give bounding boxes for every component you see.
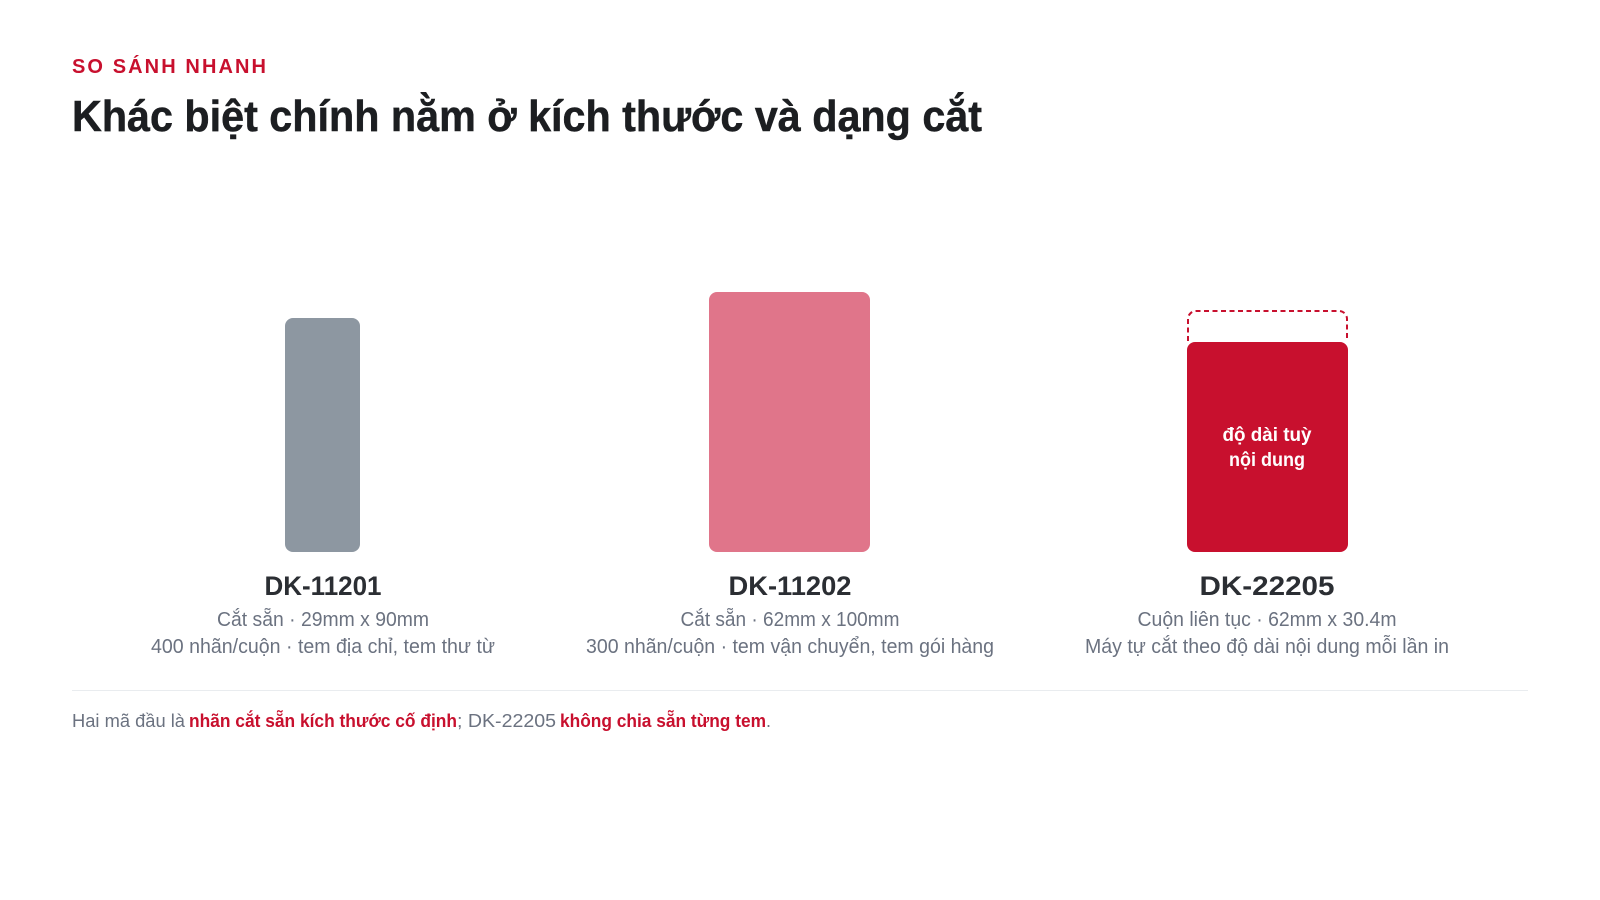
bar caption: độ dài tuỳ <box>1222 425 1312 446</box>
spec line: Cắt sẵn · 29mm x 90mm <box>217 608 429 631</box>
footnote <box>72 709 771 731</box>
usage line: 300 nhãn/cuộn · tem vận chuyển, tem gói hàng <box>586 636 994 658</box>
dashed outline: variable length <box>1188 311 1347 341</box>
model name: DK-11202: DK-11202 <box>728 571 852 601</box>
spec line: Cắt sẵn · 62mm x 100mm <box>680 608 900 631</box>
label bar: DK-11201 <box>285 318 360 552</box>
label bar: DK-11202 <box>709 292 870 552</box>
footnote: không chia sẵn từng tem <box>560 709 766 731</box>
spec line: Cuộn liên tục · 62mm x 30.4m <box>1138 609 1396 631</box>
panel: DK-22205 <box>1085 311 1449 658</box>
footnote: . <box>766 711 771 731</box>
usage line: 400 nhãn/cuộn · tem địa chỉ, tem thư từ <box>151 636 495 658</box>
panel: DK-11202 <box>586 292 994 658</box>
eyebrow: SO SÁNH NHANH <box>72 55 266 78</box>
bar caption: nội dung <box>1229 450 1305 471</box>
model name: DK-22205: DK-22205 <box>1200 571 1334 601</box>
footnote: Hai mã đầu là <box>72 711 186 731</box>
model name: DK-11201: DK-11201 <box>264 571 382 601</box>
label bar: DK-22205 <box>1187 342 1348 552</box>
panel: DK-11201 <box>151 318 495 658</box>
footnote: ; DK-22205 <box>457 711 556 731</box>
footnote: nhãn cắt sẵn kích thước cố định <box>189 709 457 731</box>
usage line: Máy tự cắt theo độ dài nội dung mỗi lần in <box>1085 635 1449 658</box>
bar caption <box>1222 425 1312 471</box>
title: Khác biệt chính nằm ở kích thước và dạng cắt <box>72 91 982 141</box>
